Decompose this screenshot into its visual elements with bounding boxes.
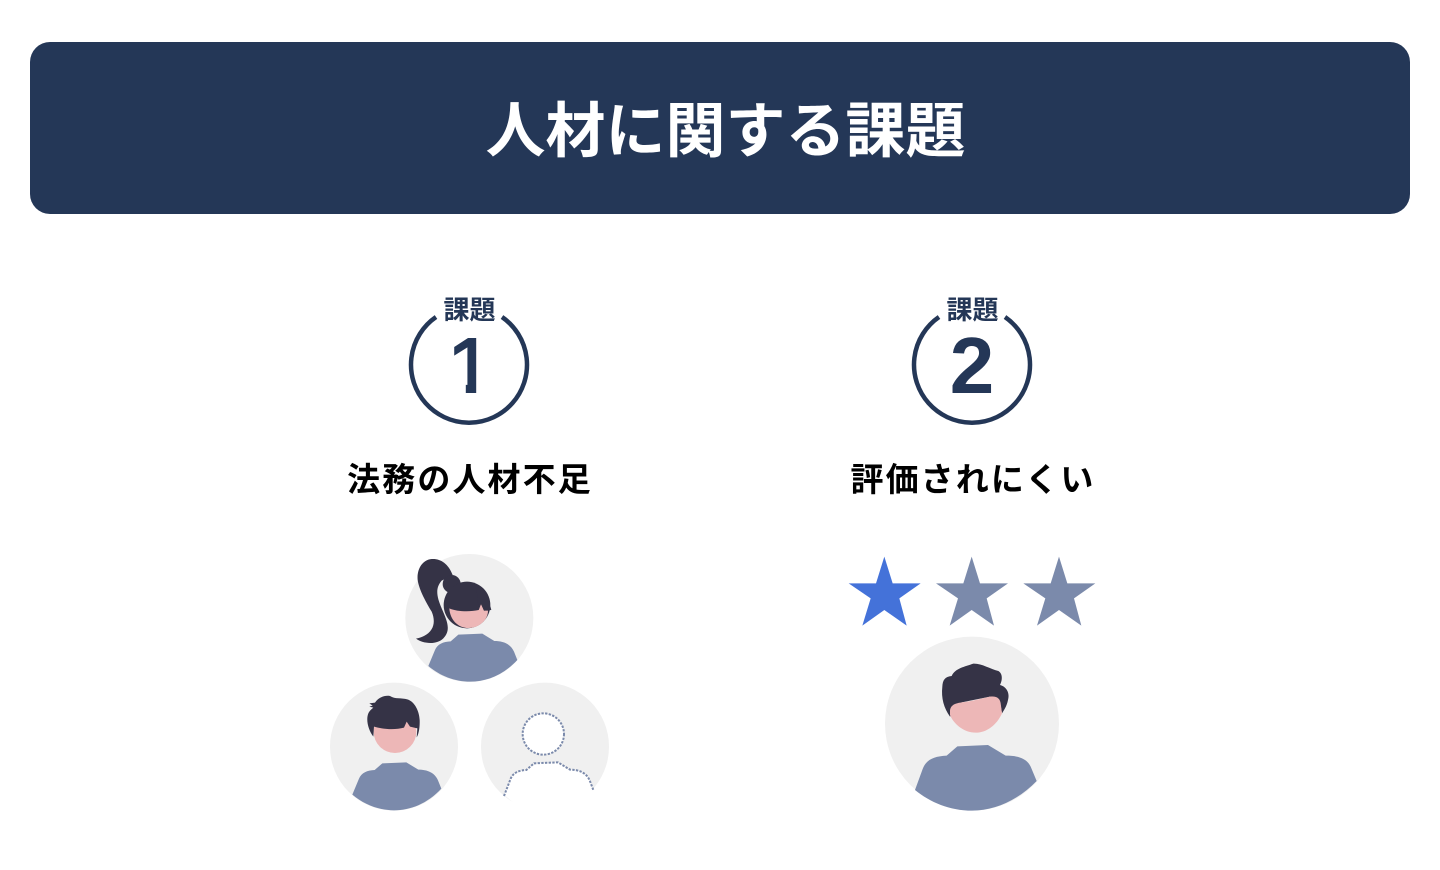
illustration: rated person bbox=[849, 557, 1095, 811]
icon: vacant person placeholder bbox=[481, 683, 609, 817]
title: 人材に関する課題 bbox=[486, 98, 966, 165]
panel: issue 2 bbox=[849, 295, 1096, 811]
heading: issue 1: 法務の人材不足 bbox=[347, 461, 593, 498]
illustration: three people bbox=[330, 554, 609, 817]
badge: issue 1: 課題 bbox=[443, 295, 496, 325]
icon: man bbox=[330, 683, 458, 811]
icon: woman bbox=[405, 554, 533, 682]
badge: issue 2: 2 bbox=[950, 321, 994, 410]
badge: issue 2 bbox=[914, 295, 1030, 423]
title banner bbox=[30, 42, 1410, 214]
panel: issue 1 bbox=[330, 295, 609, 817]
badge: issue 2: 課題 bbox=[946, 295, 999, 325]
icon: person bbox=[885, 637, 1059, 811]
badge: issue 1 bbox=[411, 295, 527, 423]
icon: stars bbox=[849, 557, 1095, 626]
badge: issue 1: 1 bbox=[449, 321, 493, 410]
heading: issue 2: 評価されにくい bbox=[850, 461, 1096, 498]
